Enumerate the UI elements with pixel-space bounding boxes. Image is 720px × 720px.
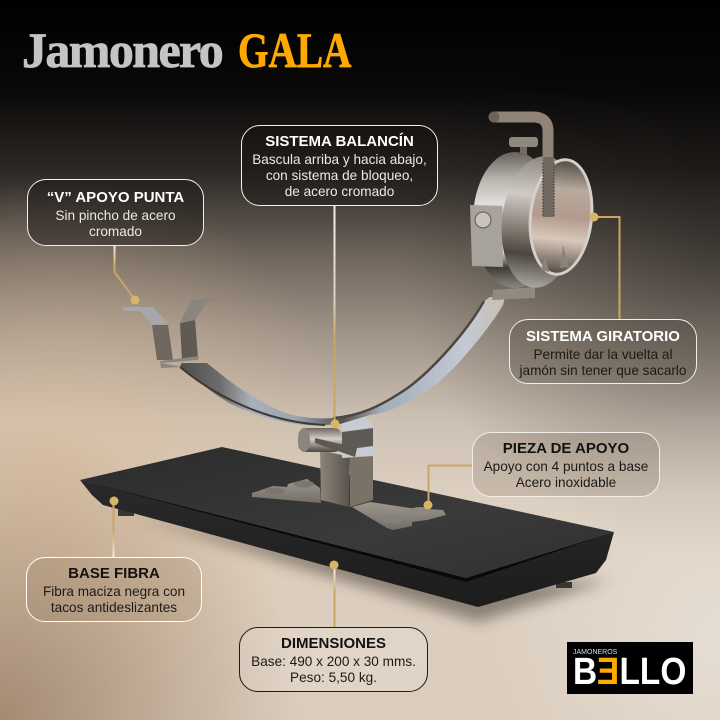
callout: sistema giratorio: Permite dar la vuelta al bbox=[533, 347, 673, 362]
callout: V apoyo punta bbox=[27, 179, 204, 246]
callout: pieza de apoyo bbox=[472, 432, 660, 497]
mounting plates bbox=[252, 479, 446, 530]
title: Jamonero bbox=[22, 22, 222, 78]
callout: dimensiones: Base: 490 x 200 x 30 mms. bbox=[251, 654, 416, 669]
leader lines bbox=[114, 206, 620, 627]
callout: dimensiones: DIMENSIONES bbox=[281, 635, 386, 652]
callout: sistema giratorio: SISTEMA GIRATORIO bbox=[526, 328, 680, 345]
callout: base fibra: tacos antideslizantes bbox=[51, 600, 177, 615]
callout: V apoyo punta: Sin pincho de acero bbox=[55, 208, 176, 223]
callout: base fibra: Fibra maciza negra con bbox=[43, 584, 185, 599]
callout: pieza de apoyo: Acero inoxidable bbox=[516, 475, 616, 490]
rotating ring system bbox=[470, 112, 599, 300]
callout: pieza de apoyo: Apoyo con 4 puntos a base bbox=[484, 459, 648, 474]
upright bracket bbox=[298, 416, 373, 507]
callout: V apoyo punta: “V” APOYO PUNTA bbox=[47, 189, 184, 206]
callout: sistema giratorio: jamón sin tener que sacarlo bbox=[520, 363, 686, 378]
base board bbox=[80, 447, 614, 622]
callout: sistema balancin: de acero cromado bbox=[285, 184, 394, 199]
callout: base fibra bbox=[26, 557, 202, 622]
callout: base fibra: BASE FIBRA bbox=[68, 565, 160, 582]
callout: sistema giratorio bbox=[509, 319, 697, 384]
logo: Jamoneros Bello: JAMONEROS bbox=[573, 649, 617, 656]
curved cradle arm bbox=[180, 297, 505, 425]
callout: V apoyo punta: cromado bbox=[89, 224, 142, 239]
title: GALA bbox=[238, 22, 351, 78]
callout: sistema balancin: Bascula arriba y hacia abajo, bbox=[252, 152, 427, 167]
callout: dimensiones bbox=[239, 627, 428, 692]
title bbox=[22, 22, 352, 78]
V tip support bbox=[123, 298, 220, 368]
callout: dimensiones: Peso: 5,50 kg. bbox=[290, 670, 377, 685]
callout: sistema balancin: con sistema de bloqueo, bbox=[266, 168, 413, 183]
logo: Jamoneros Bello: E bbox=[597, 651, 619, 693]
logo: Jamoneros Bello: B LLO bbox=[573, 651, 686, 693]
leader dots bbox=[110, 212, 598, 570]
callout: sistema balancin: SISTEMA BALANCÍN bbox=[265, 133, 414, 150]
callout: pieza de apoyo: PIEZA DE APOYO bbox=[503, 440, 629, 457]
callout: sistema balancin bbox=[241, 125, 438, 206]
